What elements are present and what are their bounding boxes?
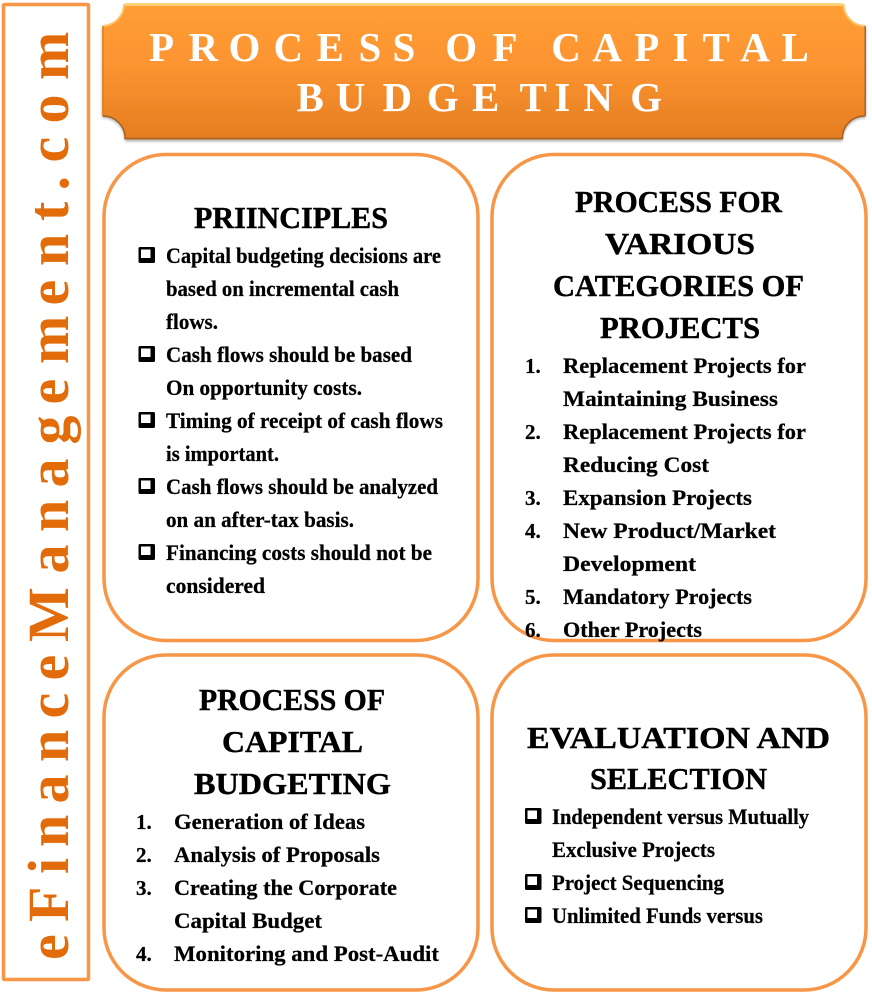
bullet list: principles: is important. <box>166 441 279 466</box>
sidebar: website name: eFinanceManagement.com <box>16 32 81 960</box>
heading: process of capital budgeting <box>194 682 391 801</box>
heading: process for various categories of projects: VARIOUS <box>605 226 755 261</box>
panel: process of capital budgeting <box>104 655 478 990</box>
numbered list: project categories: 3. <box>525 486 541 510</box>
numbered list: project categories: Expansion Projects <box>563 485 752 510</box>
title banner <box>102 3 866 140</box>
numbered list: project categories <box>525 353 806 642</box>
panel: process for various categories of projects <box>492 154 866 642</box>
numbered list: project categories: Mandatory Projects <box>563 584 752 609</box>
bullet list: principles: Capital budgeting decisions are <box>166 243 441 268</box>
bullet list: evaluation <box>525 804 809 928</box>
heading: process of capital budgeting: BUDGETING <box>194 766 391 801</box>
heading: evaluation and selection: EVALUATION AND <box>527 720 830 755</box>
heading: process for various categories of projects: PROJECTS <box>600 310 760 345</box>
numbered list: project categories: Reducing Cost <box>563 452 710 477</box>
numbered list: project categories: 4. <box>525 519 541 543</box>
numbered list: process steps: 4. <box>136 942 152 966</box>
bullet list: principles: Financing costs should not be <box>166 540 432 565</box>
title banner: PROCESS OF CAPITAL <box>149 24 809 70</box>
numbered list: project categories: Development <box>563 551 697 576</box>
numbered list: process steps: Generation of Ideas <box>174 809 365 834</box>
numbered list: project categories: Replacement Projects for <box>563 419 806 444</box>
numbered list: process steps: 2. <box>136 843 152 867</box>
bullet list: principles: Cash flows should be analyzed <box>166 474 438 499</box>
numbered list: process steps: Capital Budget <box>174 908 323 933</box>
heading: process for various categories of projects: CATEGORIES OF <box>553 268 804 303</box>
numbered list: project categories: Other Projects <box>563 617 702 642</box>
numbered list: project categories: 6. <box>525 618 541 642</box>
bullet list: principles: Cash flows should be based <box>166 342 412 367</box>
panel: evaluation and selection <box>492 655 866 990</box>
heading: process of capital budgeting: CAPITAL <box>222 724 363 759</box>
bullet list: principles: Timing of receipt of cash flows <box>166 408 443 433</box>
bullet list: evaluation: Unlimited Funds versus <box>552 903 763 928</box>
title banner: BUDGETING <box>296 74 662 120</box>
numbered list: process steps: 3. <box>136 876 152 900</box>
numbered list: project categories: Maintaining Business <box>563 386 778 411</box>
bullet list: principles <box>138 243 443 598</box>
heading: process for various categories of projects: PROCESS FOR <box>575 184 783 219</box>
heading: process of capital budgeting: PROCESS OF <box>199 682 385 717</box>
numbered list: process steps: Monitoring and Post-Audit <box>174 941 440 966</box>
numbered list: project categories: 5. <box>525 585 541 609</box>
numbered list: project categories: 2. <box>525 420 541 444</box>
bullet list: principles: on an after-tax basis. <box>166 507 354 532</box>
bullet list: principles: based on incremental cash <box>166 276 399 301</box>
numbered list: process steps: Creating the Corporate <box>174 875 397 900</box>
panel: principles <box>104 154 478 640</box>
numbered list: project categories: 1. <box>525 354 541 378</box>
heading: evaluation and selection: SELECTION <box>590 761 767 796</box>
numbered list: process steps: 1. <box>136 810 152 834</box>
bullet list: evaluation: Project Sequencing <box>552 870 724 895</box>
bullet list: principles: On opportunity costs. <box>166 375 362 400</box>
bullet list: principles: considered <box>166 573 265 598</box>
heading: process for various categories of projects <box>553 184 804 345</box>
numbered list: project categories: New Product/Market <box>563 518 777 543</box>
bullet list: evaluation: Exclusive Projects <box>552 837 715 862</box>
numbered list: process steps: Analysis of Proposals <box>174 842 380 867</box>
bullet list: evaluation: Independent versus Mutually <box>552 804 809 829</box>
heading: evaluation and selection <box>527 720 830 796</box>
bullet list: principles: flows. <box>166 309 218 334</box>
numbered list: process steps <box>136 809 440 966</box>
heading: principles: PRIINCIPLES <box>194 200 388 235</box>
numbered list: project categories: Replacement Projects for <box>563 353 806 378</box>
